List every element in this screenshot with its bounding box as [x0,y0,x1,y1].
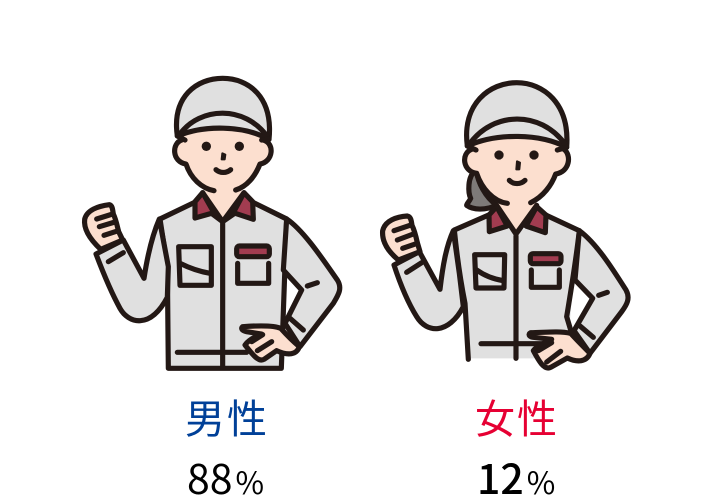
female bent arm [574,231,628,353]
male bent arm [283,219,340,347]
male right pocket [237,246,269,283]
female left pocket [475,255,505,288]
male jacket body [160,202,287,368]
male cap [177,78,269,140]
label: female: 女性 [475,387,559,445]
female right pocket [530,254,561,287]
female fist [383,216,420,260]
figure: female worker [383,83,628,368]
figure: male worker [85,78,340,368]
female centre zip [481,236,547,358]
label: male: 男性 [185,387,269,445]
male eyes, nose and mouth [202,142,244,172]
female raised arm [394,231,463,329]
male left pocket [179,247,211,285]
male centre zip [177,223,247,367]
female neck and collar [489,202,546,234]
male neck and collar [195,188,253,222]
female hand on hip [529,332,590,368]
male fist [85,205,123,249]
male head [174,123,271,191]
male raised arm [96,219,168,321]
female cap [467,83,567,150]
female hair [467,170,497,209]
female jacket body [454,215,579,358]
female head [464,130,569,203]
female eyes, nose and mouth [494,150,539,184]
male hand on hip [242,326,299,360]
